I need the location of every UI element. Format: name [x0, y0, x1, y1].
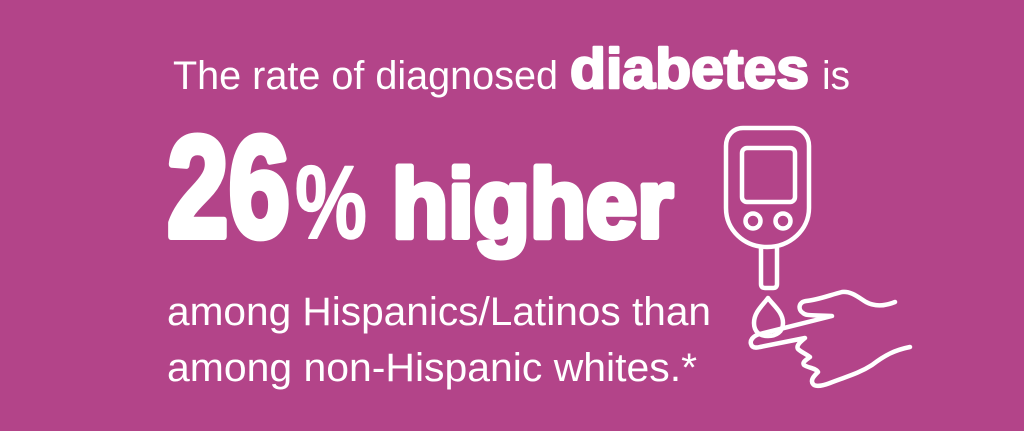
big statistic: 26% higher: [167, 106, 673, 268]
icon: hand: [751, 292, 910, 386]
heading line: the rate of diagnosed diabetes is: is: [822, 54, 850, 98]
icon: blood drop: [754, 298, 783, 336]
body text: among Hispanics/Latinos than among non-Hispanic whites: among Hispanics/Latinos than: [167, 290, 711, 334]
icon: meter screen: [742, 148, 795, 202]
heading line: the rate of diagnosed diabetes is: diabetes: [570, 37, 809, 101]
body text: among Hispanics/Latinos than among non-Hispanic whites: [167, 290, 711, 390]
heading line: the rate of diagnosed diabetes is: [173, 37, 850, 101]
big statistic: 26% higher: %: [295, 145, 367, 261]
big statistic: 26% higher: higher: [392, 149, 673, 258]
icon: meter buttons: [746, 214, 790, 228]
heading line: the rate of diagnosed diabetes is: The rate of diagnosed: [173, 54, 558, 98]
icon: glucose meter and hand: [726, 128, 910, 386]
icon: test strip: [761, 248, 777, 288]
icon: glucose meter body: [726, 128, 809, 247]
body text: among Hispanics/Latinos than among non-Hispanic whites: among non-Hispanic whites.*: [167, 346, 697, 390]
big statistic: 26% higher: 26: [167, 106, 290, 268]
